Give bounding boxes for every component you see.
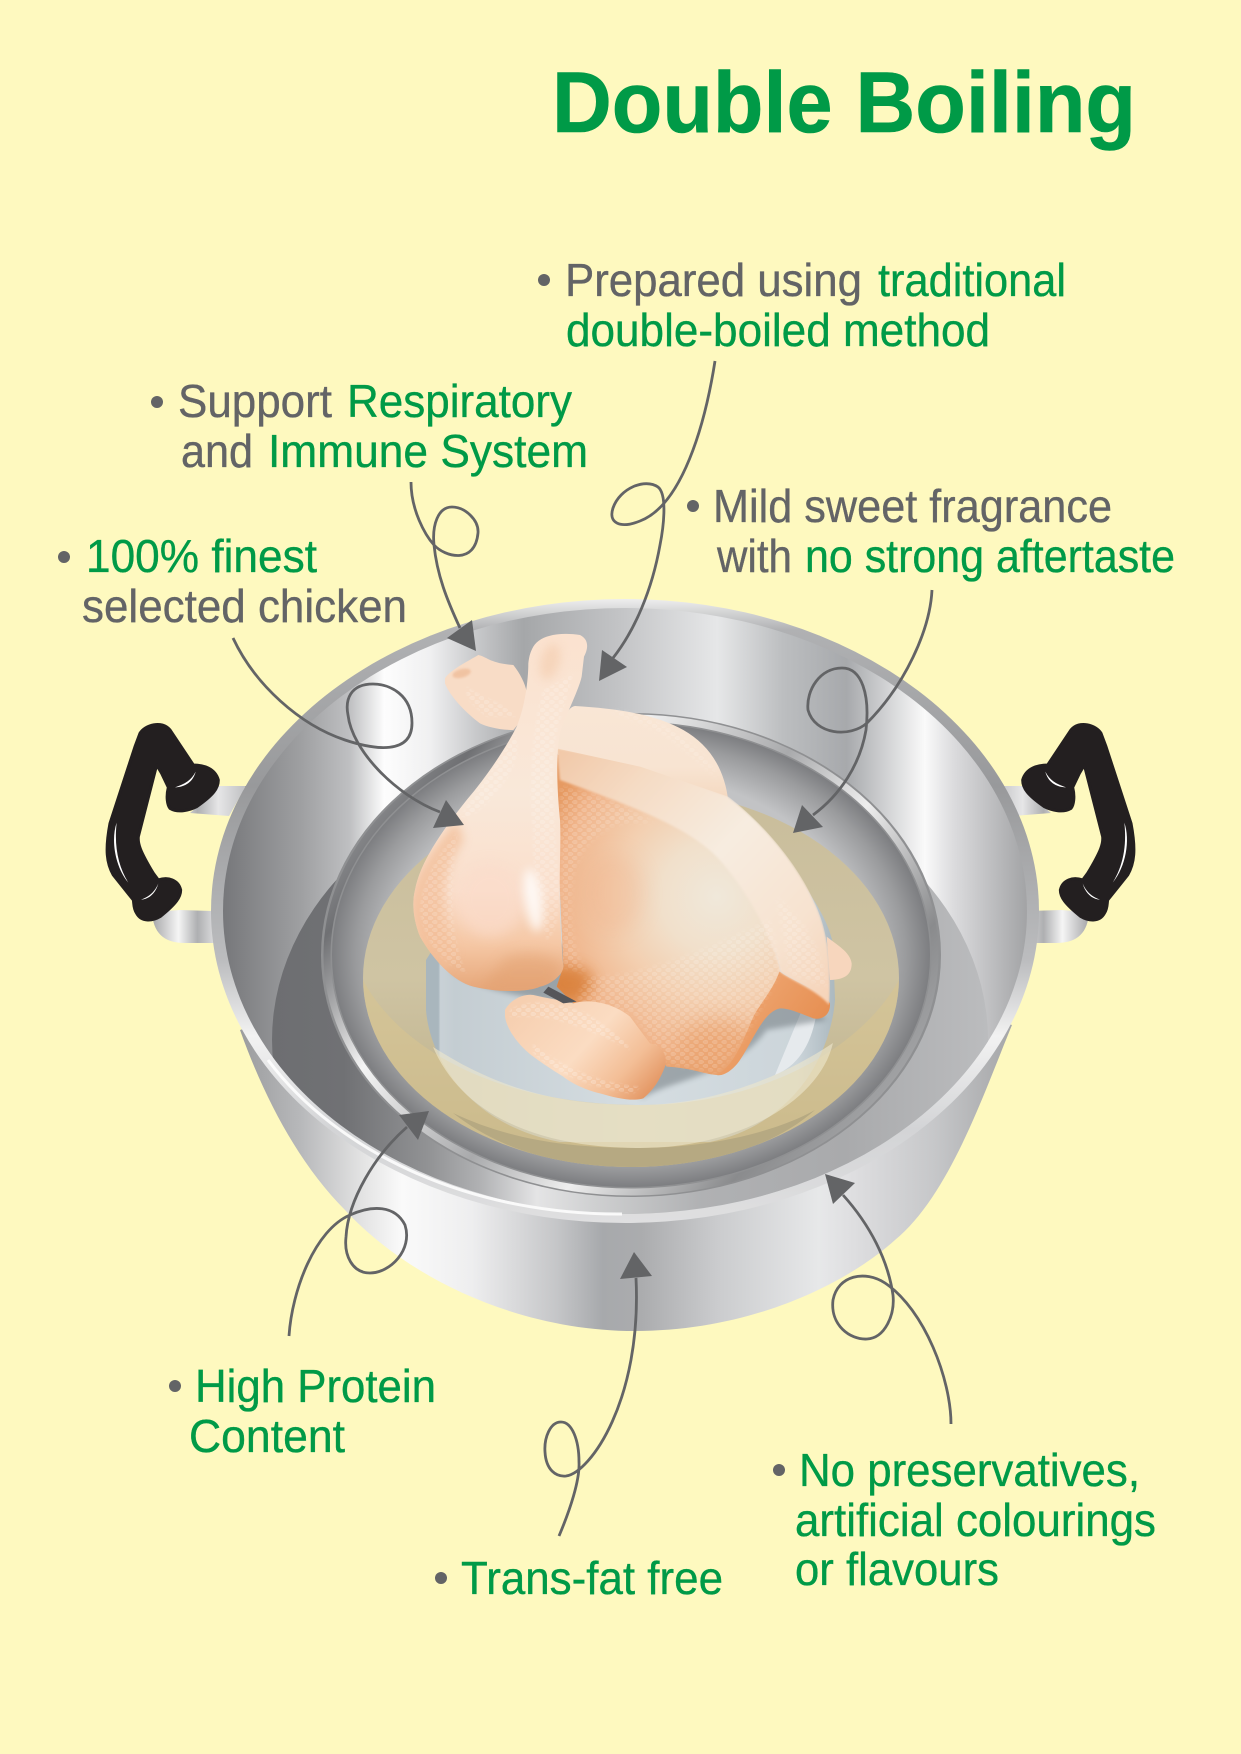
bullet xyxy=(538,274,550,286)
title: Double Boiling xyxy=(552,55,1136,151)
callout text: selected chicken xyxy=(82,580,407,632)
callout text: traditional xyxy=(878,254,1066,306)
callout text: Immune System xyxy=(268,425,588,477)
chicken leg xyxy=(413,634,588,991)
callout text: 100% finest xyxy=(86,530,317,582)
callout text: with xyxy=(716,530,792,582)
callout text: and xyxy=(181,425,253,477)
callout text: High Protein xyxy=(195,1360,436,1412)
chicken front wing xyxy=(505,994,666,1100)
bullet xyxy=(58,551,70,563)
callout: no preservatives, artificial colourings or flavours xyxy=(773,1174,1156,1595)
callout text: artificial colourings xyxy=(795,1494,1156,1546)
callout text xyxy=(795,1444,1156,1595)
chicken breast xyxy=(547,754,780,1075)
icon: right pot handle xyxy=(995,724,1134,943)
callout text: double-boiled method xyxy=(566,304,990,356)
chicken back xyxy=(557,706,731,820)
callout text: Content xyxy=(189,1410,345,1462)
icon: left pot handle xyxy=(107,724,246,943)
callout text: Trans-fat free xyxy=(461,1552,723,1604)
callout text: Respiratory xyxy=(347,375,572,427)
outer pot body xyxy=(240,900,1012,1331)
callout: trans-fat free xyxy=(435,1252,723,1604)
arrow xyxy=(411,482,478,651)
soup xyxy=(363,789,899,1167)
arrow xyxy=(599,361,715,681)
callout text xyxy=(713,480,1175,582)
bullet xyxy=(773,1464,785,1476)
outer pot inner wall xyxy=(223,608,1027,1214)
soup surface overlay xyxy=(363,980,899,1170)
callout text xyxy=(189,1360,436,1462)
bullet xyxy=(687,500,699,512)
chicken xyxy=(413,634,852,1100)
chicken flank xyxy=(700,970,830,1075)
arrow xyxy=(793,590,932,833)
arrow xyxy=(289,1111,429,1336)
shadow on the pot wall xyxy=(272,880,988,1214)
callout: prepared using traditional double-boiled method xyxy=(538,254,1066,681)
bullet xyxy=(169,1380,181,1392)
callout: 100% finest selected chicken xyxy=(58,530,464,828)
chicken wing along back xyxy=(557,748,830,1005)
callout text: Support xyxy=(178,375,332,427)
callout: mild sweet fragrance with no strong aftertaste xyxy=(687,480,1175,833)
bullet xyxy=(435,1572,447,1584)
inner plate xyxy=(426,880,835,1142)
outer pot rim xyxy=(211,599,1039,1223)
callout text: no strong aftertaste xyxy=(805,530,1175,582)
callout text xyxy=(178,375,588,477)
callout text: Prepared using xyxy=(565,254,862,306)
chicken skin texture xyxy=(559,739,824,1074)
pot illustration xyxy=(107,599,1134,1331)
arrow xyxy=(545,1252,652,1536)
callout text xyxy=(565,254,1066,356)
arrow xyxy=(233,638,464,828)
callout text: Mild sweet fragrance xyxy=(713,480,1112,532)
plate highlight xyxy=(775,1000,818,1075)
chicken second leg tip xyxy=(445,655,527,730)
front rim highlight xyxy=(268,1060,622,1214)
chicken tail xyxy=(827,937,852,980)
callout text: No preservatives, xyxy=(799,1444,1140,1496)
callout text: or flavours xyxy=(795,1543,999,1595)
bullet xyxy=(151,396,163,408)
callout: support respiratory and immune system xyxy=(151,375,588,651)
gap shadow between leg and wing xyxy=(543,987,577,1003)
shadow under chicken xyxy=(450,945,827,1100)
callout text xyxy=(82,530,407,632)
callout: high protein content xyxy=(169,1111,436,1462)
arrow xyxy=(825,1174,951,1424)
inner bowl xyxy=(321,713,941,1197)
